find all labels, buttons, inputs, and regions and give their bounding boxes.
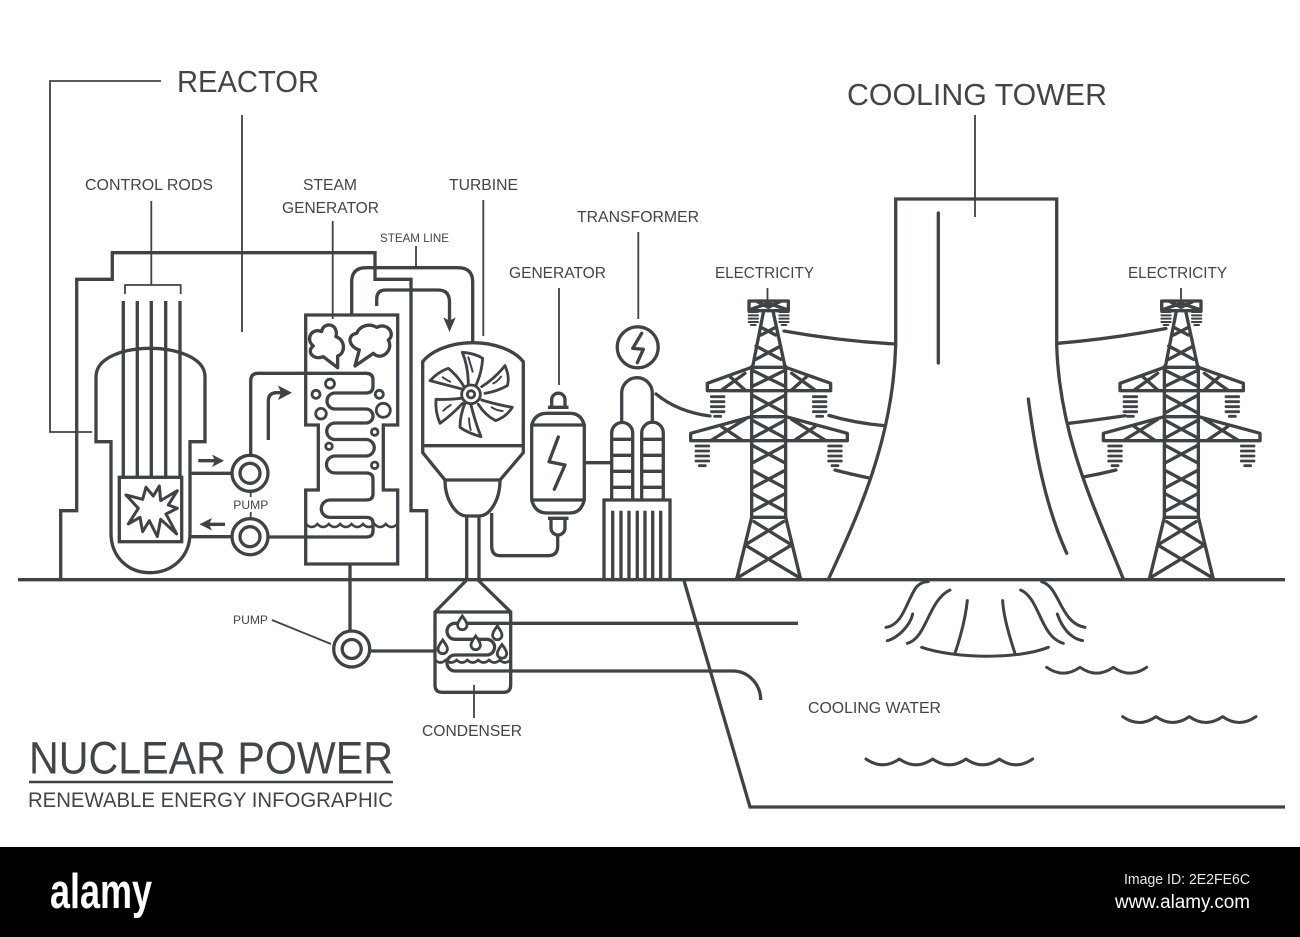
cooling tower [828,199,1124,580]
generator [492,393,584,556]
water drops [438,616,507,658]
ground line [18,578,1285,581]
steam generator label: GENERATOR [282,200,379,217]
steam generator vessel [306,315,398,564]
turbine bowl and shafts [445,480,500,580]
reactor core [119,477,182,542]
icon: electricity circle [617,327,658,368]
tower legs [737,517,801,579]
power lines to cooling tower [784,328,1166,478]
title block [28,732,393,812]
transmission tower right [1103,301,1260,579]
tower top cap [749,301,788,311]
transformer base [604,500,670,580]
pump label: PUMP [233,498,268,512]
reactor heading and leader lines [50,64,319,432]
electricity label right [1128,265,1227,302]
condenser vessel [435,580,511,692]
steam line label: STEAM LINE [380,231,449,245]
condenser label [422,685,522,740]
footer logo: alamy [50,865,152,919]
condenser label: CONDENSER [422,723,522,740]
tower neck [753,313,785,367]
transformer [604,327,670,580]
electricity label right: ELECTRICITY [1128,265,1227,282]
generator label: GENERATOR [509,265,606,282]
tower body [752,367,786,517]
title block: NUCLEAR POWER [29,732,393,784]
cooling water label: COOLING WATER [808,700,941,717]
water waves [866,667,1256,765]
control rods label [85,177,213,294]
icon: lightning bolt [549,437,565,489]
panel: reactor building outline [61,253,427,580]
reactor vessel with control rods and core [96,301,205,573]
pump pipes between reactor and steam generator [190,473,232,537]
pump bottom [334,631,370,667]
flow arrows [198,386,292,530]
generator caps [548,393,568,535]
steam generator label: STEAM [303,177,357,194]
steam generator [251,315,398,564]
condenser [435,580,798,700]
steam clouds [310,325,391,368]
condenser coil and cooling pipes [447,623,798,700]
connection generator to transformer [585,461,611,464]
insulators arms [696,397,841,466]
cooling tower heading: COOLING TOWER [847,77,1107,112]
tower shading lines [938,213,1067,553]
pump lower [232,519,268,555]
cooling water basin outline [684,579,1285,807]
pump label lower: PUMP [233,613,268,627]
electricity label left: ELECTRICITY [715,265,814,282]
footer bar [0,847,1300,937]
turbine casing [423,343,523,480]
reactor heading and leader lines: REACTOR [177,64,319,99]
generator body [532,413,584,513]
transmission tower left [691,301,847,579]
icon: turbine fan [430,352,512,437]
pump upper [232,455,268,491]
electricity label left [715,265,814,302]
image id: Image ID: 2E2FE6C [1124,871,1250,888]
transformer wire loop [622,378,652,422]
insulators top [749,312,789,325]
heat exchange coil [251,373,374,537]
control rods [123,301,180,477]
power line from transformer to tower [656,394,710,416]
website: www.alamy.com [1114,892,1250,913]
tower outline [828,199,1124,580]
generator label [509,265,606,385]
icon: core explosion [126,486,177,537]
turbine [423,343,523,580]
transformer label [577,209,699,319]
transformer label: TRANSFORMER [577,209,699,226]
steam generator label [282,177,379,319]
pumps [232,455,268,555]
generator output pipe [492,513,558,556]
pump label lower [233,613,331,644]
control rods label: CONTROL RODS [85,177,213,194]
title block: RENEWABLE ENERGY INFOGRAPHIC [28,789,393,812]
steam flow arrow [377,290,456,332]
steam line pipe [352,231,473,342]
bubbles [312,379,390,469]
transformer coils [612,422,663,500]
tower upper arm [707,367,831,391]
water outflow under tower [886,582,1085,656]
lower pump and pipes [334,564,435,667]
turbine label: TURBINE [449,177,518,194]
condenser water [435,660,511,662]
tower lower arm [691,417,847,441]
water surface [306,524,397,527]
